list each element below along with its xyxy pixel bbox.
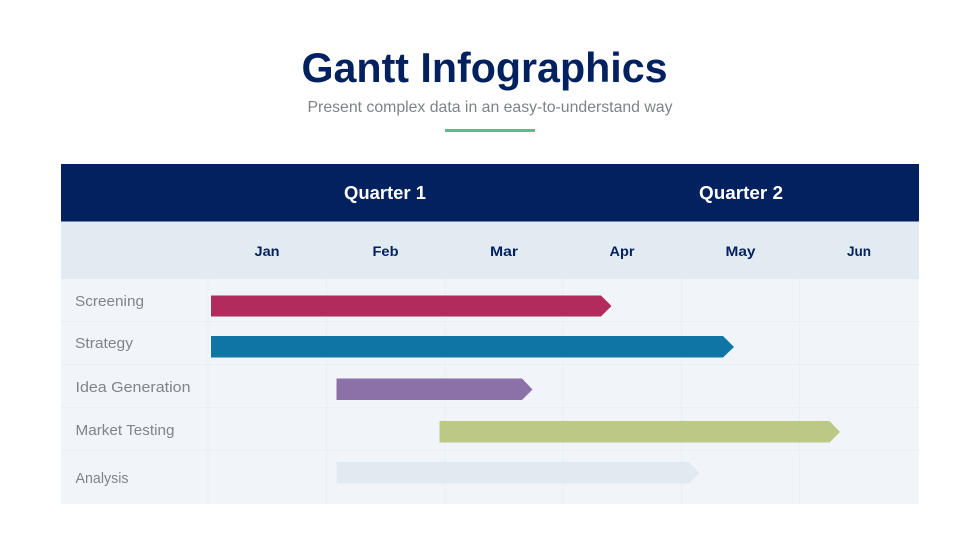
label: quarter 1: Quarter 1 [344, 183, 426, 203]
bar: Strategy [211, 336, 734, 358]
row label: Strategy: Strategy [75, 335, 134, 352]
bar: Screening [211, 296, 612, 316]
row label: Market Testing: Market Testing [76, 422, 174, 439]
row label: Analysis: Analysis [76, 470, 128, 487]
quarter header band [61, 164, 919, 222]
label: quarter 2: Quarter 2 [699, 183, 783, 203]
subtitle: Present complex data in an easy-to-understand way [308, 99, 672, 116]
month: Feb: Feb [372, 243, 398, 259]
month: Mar: Mar [490, 243, 519, 259]
row label: Screening: Screening [75, 293, 144, 310]
month: May: May [726, 243, 756, 259]
grid body [61, 279, 919, 504]
month: Apr: Apr [610, 243, 635, 259]
bar: Market Testing [440, 421, 840, 442]
month: Jan: Jan [254, 243, 280, 259]
title accent line [445, 129, 535, 132]
panel: gantt table [61, 164, 919, 504]
month header band [61, 222, 919, 279]
bar: Idea Generation [336, 378, 532, 400]
month: Jun: Jun [847, 243, 871, 259]
row label: Idea Generation: Idea Generation [76, 379, 190, 396]
title: Gantt Infographics [302, 44, 668, 91]
bar: Analysis [336, 462, 700, 484]
